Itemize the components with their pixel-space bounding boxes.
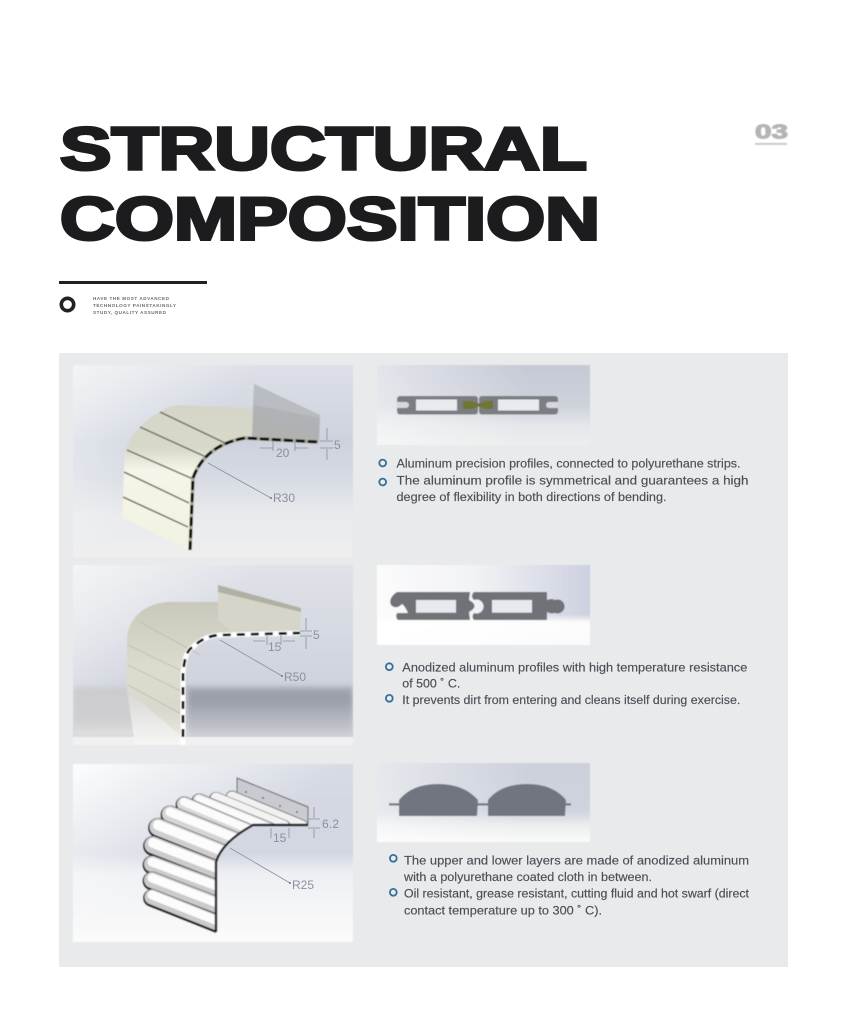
text block: upper and lower layers: contact temperature up to 300 ˚ C).	[404, 903, 602, 917]
cross-section: R30 strip	[377, 365, 590, 445]
text block: aluminum precision profiles: degree of flexibility in both directions of bending.	[396, 490, 666, 504]
dimension labels: 5	[334, 438, 341, 452]
page number: 03	[755, 122, 788, 144]
dimension labels: R50	[284, 670, 306, 684]
bullet	[386, 663, 393, 670]
text block: upper and lower layers	[390, 853, 750, 917]
infographic page	[59, 124, 788, 967]
title: STRUCTURAL	[60, 116, 587, 182]
title: COMPOSITION	[60, 186, 600, 252]
cross-section: R25 strip	[377, 763, 590, 842]
text block: anodized aluminum profiles: Anodized aluminum profiles with high temperature resistance	[402, 660, 747, 674]
dimension labels: 6.2	[322, 817, 339, 831]
tagline: TECHNOLOGY PAINSTAKINGLY	[93, 303, 176, 308]
bullet	[386, 695, 393, 702]
main panel	[59, 353, 788, 967]
illustration: R25 profile	[73, 764, 353, 942]
bullet	[379, 479, 386, 485]
dimension labels: 15	[268, 640, 282, 654]
dimension labels: R30	[273, 491, 295, 505]
text block: anodized aluminum profiles	[386, 660, 747, 707]
dimension labels	[268, 628, 320, 684]
illustration: R30 profile	[73, 365, 353, 557]
illustration: R50 profile	[73, 565, 353, 745]
icon: ring	[61, 298, 74, 311]
dimension labels	[273, 438, 341, 505]
text block: anodized aluminum profiles: It prevents dirt from entering and cleans itself during exercise.	[402, 693, 740, 707]
text block: anodized aluminum profiles: of 500 ˚ C.	[402, 676, 460, 690]
tagline: STUDY, QUALITY ASSURED	[93, 310, 167, 315]
dimension labels: 15	[273, 831, 287, 845]
bullet	[379, 460, 386, 466]
text block: aluminum precision profiles: The aluminum profile is symmetrical and guarantees a high	[396, 473, 749, 487]
text block: upper and lower layers: with a polyurethane coated cloth in between.	[403, 870, 652, 884]
dimension labels	[273, 817, 339, 892]
bullet	[390, 855, 397, 862]
text block: upper and lower layers: The upper and lower layers are made of anodized aluminum	[404, 853, 749, 867]
dimension labels: 20	[276, 446, 290, 460]
tagline: HAVE THE MOST ADVANCED	[93, 296, 170, 301]
page number	[755, 122, 788, 145]
title	[60, 116, 600, 252]
text block: aluminum precision profiles	[379, 457, 749, 504]
bullet	[390, 889, 397, 896]
dimension labels: 5	[313, 628, 320, 642]
dimension labels: R25	[292, 878, 314, 892]
tagline	[93, 296, 176, 315]
text block: aluminum precision profiles: Aluminum precision profiles, connected to polyurethane strips.	[396, 457, 740, 471]
cross-section: R50 strip	[377, 565, 590, 645]
heading rule	[59, 281, 207, 284]
text block: upper and lower layers: Oil resistant, grease resistant, cutting fluid and hot swarf (direct	[404, 887, 750, 901]
